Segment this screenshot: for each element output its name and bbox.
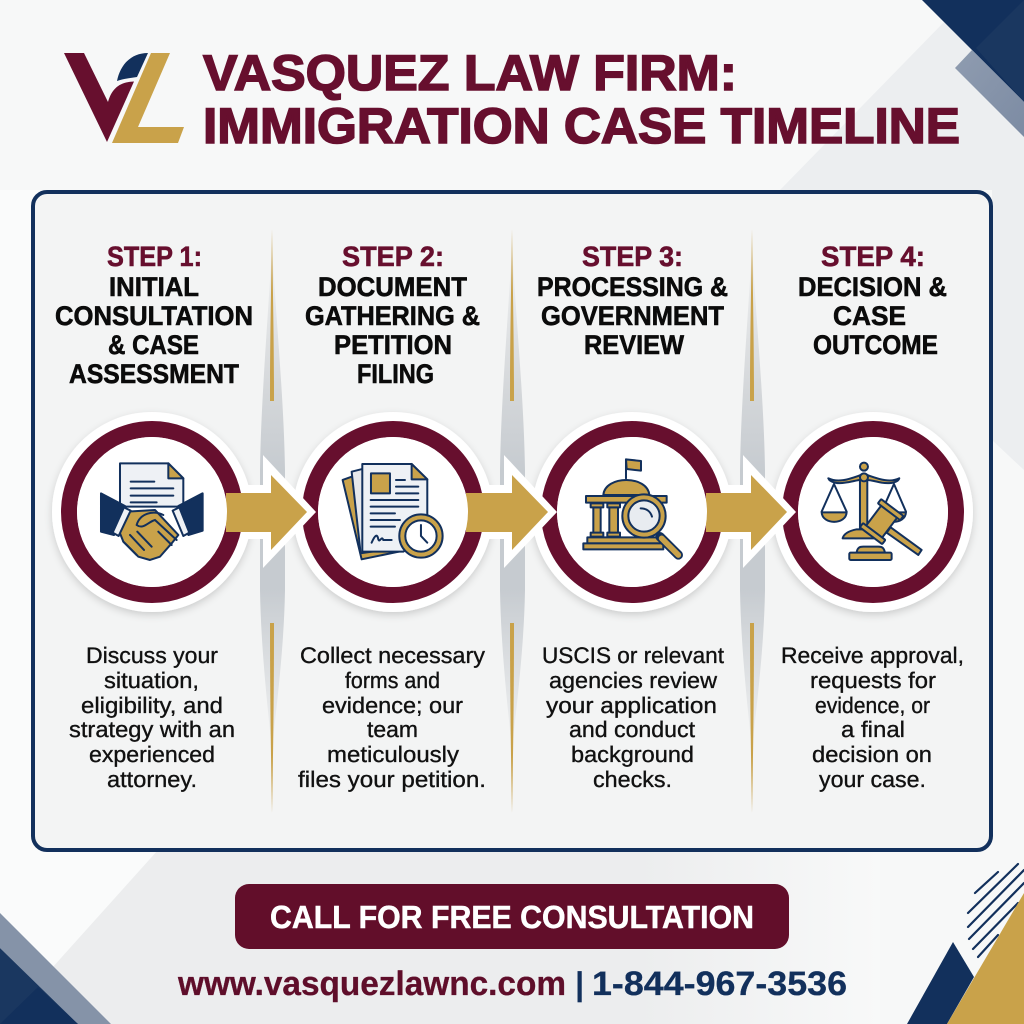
title: IMMIGRATION CASE TIMELINE: [203, 98, 960, 154]
step 2 description: evidence; our: [322, 693, 464, 718]
step 4 description: [781, 643, 964, 792]
icon: handshake and document: [101, 463, 203, 560]
step 1 description: attorney.: [107, 767, 197, 792]
step 2 description: team: [367, 717, 418, 742]
circle: step 3 ring: [532, 412, 732, 612]
step 4 description: a final: [841, 717, 905, 742]
circle: step 4 ring: [773, 412, 973, 612]
circle: step 1 ring: [52, 412, 252, 612]
step 4 description: Receive approval,: [781, 643, 964, 668]
step 3 description: your application: [546, 693, 717, 718]
step 1 description: situation,: [104, 668, 199, 693]
step 1 heading: INITIAL: [109, 272, 199, 302]
step 2 heading: DOCUMENT: [318, 272, 467, 302]
step 3 heading: REVIEW: [584, 330, 684, 360]
step 4 description: your case.: [819, 767, 926, 792]
step 1 description: Discuss your: [86, 643, 219, 668]
step 2 description: [298, 643, 486, 792]
logo: VL monogram: [64, 53, 184, 143]
step 1 description: strategy with an: [69, 717, 235, 742]
panel: timeline: [33, 192, 991, 850]
title: [203, 45, 960, 154]
step 2 heading: FILING: [357, 359, 434, 389]
step 2 description: meticulously: [327, 742, 460, 767]
step 1 description: experienced: [89, 742, 215, 767]
title: VASQUEZ LAW FIRM:: [203, 45, 737, 101]
step 3 heading: GOVERNMENT: [541, 301, 724, 331]
bottom-left corner decoration: [0, 913, 111, 1024]
arrow: step 1 to step 2: [226, 455, 316, 568]
step 3 description: and conduct: [569, 717, 696, 742]
contact line: [177, 965, 847, 1003]
step 1 heading: CONSULTATION: [55, 301, 253, 331]
contact line: www.vasquezlawnc.com: [177, 965, 566, 1003]
icon: documents with clock: [343, 464, 443, 559]
step 2 description: forms and: [345, 668, 440, 693]
step 3 heading: [537, 241, 728, 360]
step 3 heading: PROCESSING &: [537, 272, 728, 302]
step 4 description: evidence, or: [815, 693, 930, 718]
contact line: |: [575, 965, 584, 1003]
call to action button: [235, 884, 789, 949]
step 2 heading: GATHERING &: [305, 301, 480, 331]
step 1 heading: ASSESSMENT: [69, 359, 239, 389]
arrow: step 3 to step 4: [706, 455, 796, 568]
step 2 description: files your petition.: [298, 767, 486, 792]
step 3 description: checks.: [593, 767, 672, 792]
step 2 heading: PETITION: [334, 330, 452, 360]
step 3 heading: STEP 3:: [582, 241, 683, 272]
call to action button: CALL FOR FREE CONSULTATION: [270, 899, 754, 935]
vertical separators: [260, 229, 765, 813]
step 1 heading: STEP 1:: [107, 241, 202, 272]
step 4 heading: DECISION &: [798, 272, 947, 302]
step 2 heading: [305, 241, 480, 389]
step 2 description: Collect necessary: [300, 643, 486, 668]
step 1 description: [69, 643, 235, 792]
step 1 heading: & CASE: [108, 330, 199, 360]
arrow: step 2 to step 3: [466, 455, 557, 568]
icon: scales of justice with gavel: [822, 463, 922, 560]
bottom-right corner decoration: [907, 864, 1024, 1024]
step 1 description: eligibility, and: [81, 693, 223, 718]
step 1 heading: [55, 241, 253, 389]
step 3 description: background: [571, 742, 694, 767]
step 4 description: decision on: [812, 742, 932, 767]
step 3 description: [542, 643, 725, 792]
step 4 heading: STEP 4:: [821, 241, 925, 272]
step 4 heading: OUTCOME: [813, 330, 938, 360]
step 4 heading: [798, 241, 947, 360]
inner white discs: [77, 437, 948, 587]
top-right corner decoration: [922, 0, 1024, 137]
step 3 description: USCIS or relevant: [542, 643, 725, 668]
step 2 heading: STEP 2:: [342, 241, 444, 272]
step 3 description: agencies review: [549, 668, 718, 693]
contact line: 1-844-967-3536: [592, 965, 847, 1003]
step 4 heading: CASE: [833, 301, 906, 331]
circle: step 2 ring: [293, 412, 493, 612]
icon: government building with magnifier: [583, 459, 678, 555]
step 4 description: requests for: [810, 668, 937, 693]
